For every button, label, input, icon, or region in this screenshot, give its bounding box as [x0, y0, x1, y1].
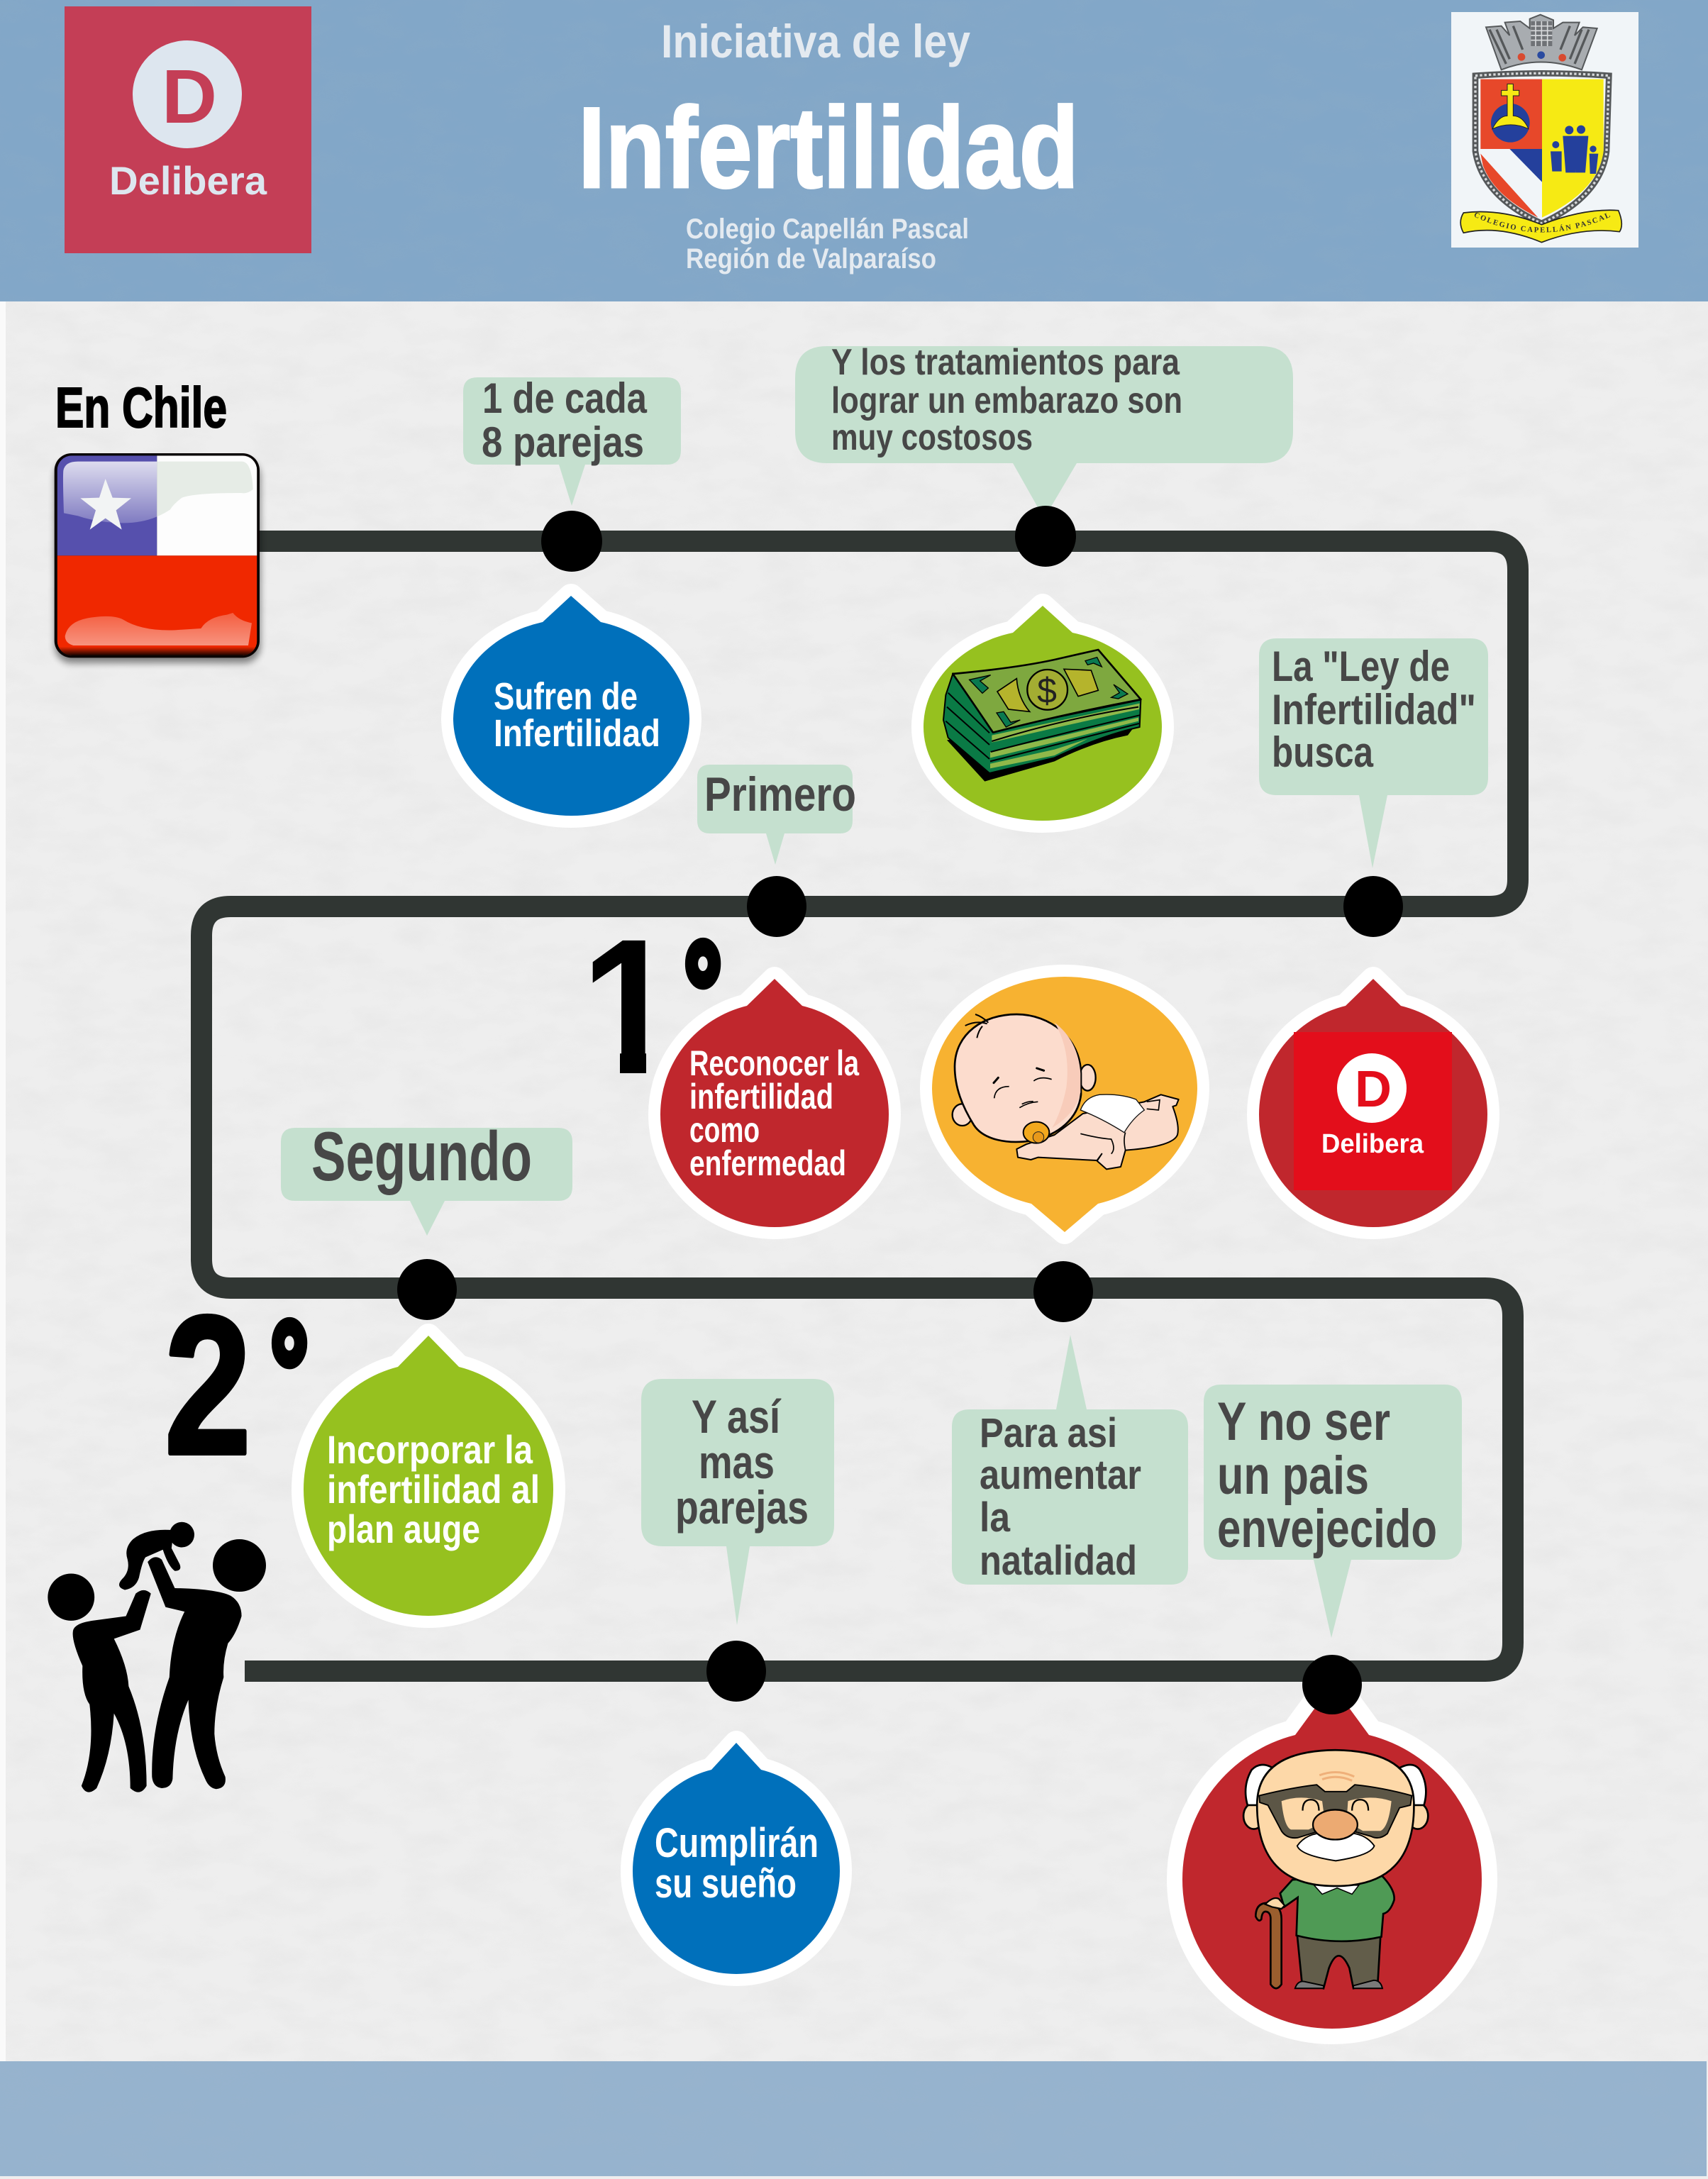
number: 1 degree: ° — [684, 913, 722, 1071]
callout: Para asi aumentar la natalidad: aumentar — [980, 1452, 1141, 1498]
bubble: reconocer la infertilidad: como — [689, 1110, 760, 1150]
callout: La Ley de Infertilidad busca: Infertilidad" — [1272, 686, 1476, 733]
bubble: incorporar al plan auge: infertilidad al — [327, 1467, 540, 1512]
icon: stack of banknotes: $ — [1037, 671, 1057, 711]
callout: Y asi mas parejas: parejas — [675, 1481, 809, 1534]
icon: sleeping baby — [953, 1014, 1179, 1169]
footer band — [0, 2061, 1707, 2176]
callout: Para asi aumentar la natalidad — [952, 1335, 1188, 1585]
bubble: Delibera logo: D — [1355, 1061, 1392, 1118]
bubble: sufren de infertilidad — [453, 596, 689, 816]
logo: Delibera header — [65, 6, 311, 253]
bubble: Delibera logo: Delibera — [1321, 1129, 1424, 1159]
callout: Primero: Primero — [704, 767, 856, 821]
subtitle: colegio y region: Región de Valparaíso — [686, 243, 936, 275]
number: 1 degree: 1 — [581, 899, 677, 1114]
callout: Segundo: Segundo — [311, 1117, 532, 1195]
bubble: cumpliran su sueno: Cumplirán — [655, 1820, 819, 1866]
callout: Para asi aumentar la natalidad: natalidad — [980, 1538, 1137, 1584]
bubble: reconocer la infertilidad — [660, 979, 889, 1227]
callout: La Ley de Infertilidad busca — [1259, 638, 1488, 868]
heading: En Chile: En Chile — [55, 376, 227, 439]
bubble: elderly man — [1182, 1685, 1482, 2029]
bubble: incorporar al plan auge: plan auge — [327, 1507, 480, 1551]
callout: Y no ser un pais envejecido: envejecido — [1217, 1499, 1437, 1559]
bubble: baby — [932, 977, 1197, 1232]
bubble: Delibera logo — [1259, 979, 1487, 1227]
icon: school crest — [1451, 12, 1638, 248]
bubble: sufren de infertilidad: Infertilidad — [494, 712, 660, 755]
callout: Y no ser un pais envejecido: un pais — [1217, 1446, 1369, 1506]
logo: Delibera header: Delibera — [109, 158, 267, 203]
callout: La Ley de Infertilidad busca: busca — [1272, 728, 1374, 776]
callout: 1 de cada 8 parejas — [463, 375, 681, 506]
callout: Y no ser un pais envejecido — [1204, 1385, 1462, 1638]
heading: iniciativa de ley: Iniciativa de ley — [661, 15, 970, 67]
header band — [0, 0, 1708, 301]
callout: Primero — [697, 765, 856, 865]
icon: school crest: COLEGIO CAPELLÁN PASCAL — [1474, 213, 1610, 233]
bubble: incorporar al plan auge — [304, 1336, 553, 1616]
callout: Y asi mas parejas — [641, 1379, 834, 1625]
icon: stack of banknotes — [943, 650, 1141, 782]
route dots — [397, 506, 1403, 1714]
bubble: reconocer la infertilidad: enfermedad — [689, 1143, 846, 1183]
callout: Y no ser un pais envejecido: Y no ser — [1217, 1392, 1390, 1452]
logo: Delibera header: D — [162, 53, 217, 139]
title: Infertilidad: Infertilidad — [578, 84, 1079, 212]
number: 2 degree: 2 — [165, 1275, 251, 1495]
callout: 1 de cada 8 parejas: 8 parejas — [482, 418, 644, 466]
callout: Segundo — [281, 1117, 572, 1236]
callout: Y asi mas parejas: mas — [699, 1436, 775, 1488]
subtitle: colegio y region — [686, 214, 969, 275]
callout: La Ley de Infertilidad busca: La "Ley de — [1272, 643, 1450, 690]
route line — [201, 541, 1518, 1671]
callout: tratamientos costosos: lograr un embarazo son — [831, 380, 1182, 421]
callout: tratamientos costosos: muy costosos — [831, 417, 1033, 458]
bubble: cumpliran su sueno — [633, 1743, 840, 1974]
icon: Chile flag — [55, 453, 260, 663]
subtitle: colegio y region: Colegio Capellán Pascal — [686, 214, 969, 245]
icon: parents lifting baby — [48, 1522, 266, 1792]
bubble: reconocer la infertilidad: infertilidad — [689, 1077, 833, 1116]
bubble: reconocer la infertilidad: Reconocer la — [689, 1043, 860, 1083]
callout: 1 de cada 8 parejas: 1 de cada — [482, 375, 648, 422]
callout: Para asi aumentar la natalidad: Para asi — [980, 1410, 1117, 1456]
callout: Para asi aumentar la natalidad: la — [980, 1495, 1011, 1541]
bubble: sufren de infertilidad: Sufren de — [494, 675, 638, 718]
number: 1 degree — [593, 938, 721, 1073]
bubble: incorporar al plan auge: Incorporar la — [327, 1427, 533, 1472]
callout: Y asi mas parejas: Y así — [692, 1390, 782, 1443]
callout: tratamientos costosos: Y los tratamientos para — [831, 342, 1180, 383]
bubble: cumpliran su sueno: su sueño — [655, 1861, 797, 1907]
callout: tratamientos costosos — [795, 342, 1293, 519]
bubble: money — [924, 606, 1162, 821]
icon: elderly man with cane — [1243, 1750, 1428, 1988]
number: 2 degree: ° — [270, 1292, 309, 1451]
